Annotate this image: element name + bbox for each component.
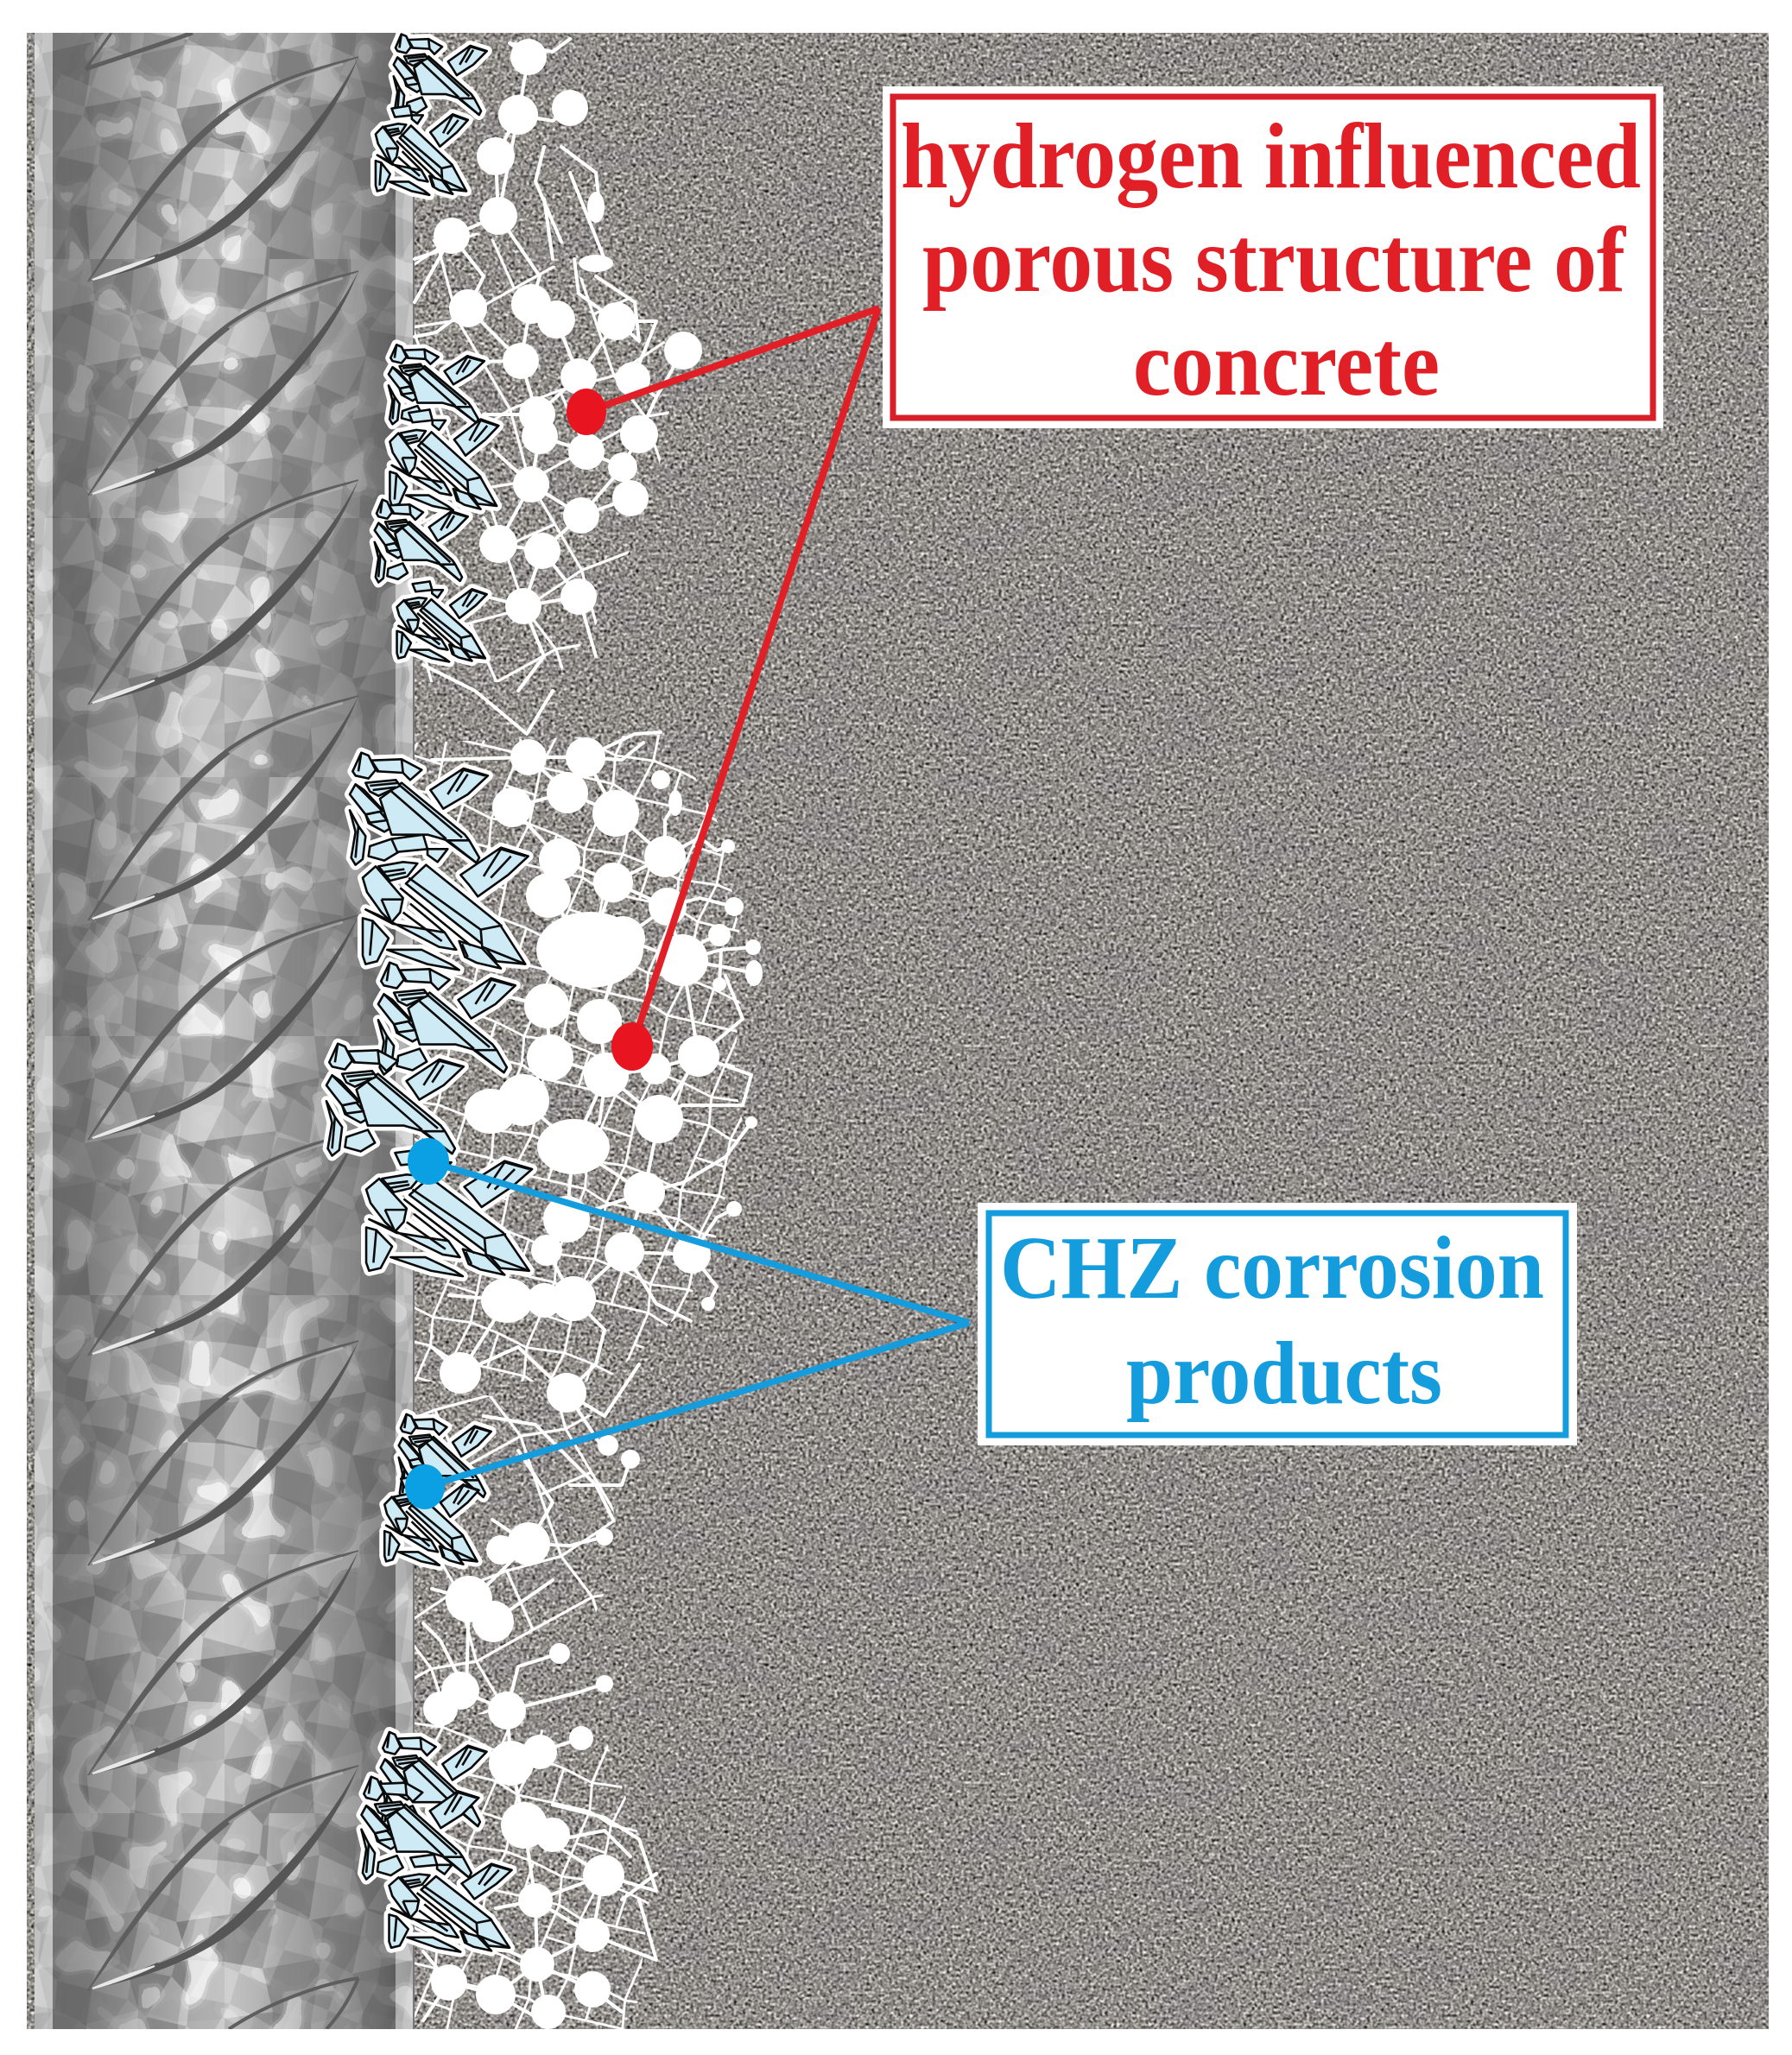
callout: hydrogen influenced porous structure of concrete — [883, 86, 1663, 428]
callout: CHZ corrosion products — [978, 1203, 1577, 1445]
callout: hydrogen influenced porous structure of concrete: concrete — [1133, 313, 1440, 415]
callout: CHZ corrosion products: CHZ corrosion — [1000, 1218, 1544, 1318]
rebar metal grains — [35, 33, 415, 2029]
callout: hydrogen influenced porous structure of concrete: hydrogen influenced — [901, 105, 1641, 208]
rebar ribs — [85, 33, 358, 2029]
corrosion product crystals: halo — [326, 35, 532, 1952]
corrosion product crystals — [326, 35, 532, 1952]
porous structure: crack network — [415, 224, 743, 2029]
steel rebar — [35, 33, 415, 2029]
callout leader lines: blue — [405, 1138, 969, 1509]
porous structure: white pores — [423, 39, 763, 2029]
callout: CHZ corrosion products: products — [1126, 1324, 1442, 1423]
porous structure: white veins — [415, 39, 754, 2024]
callout leader lines: red — [567, 308, 879, 1071]
callout: hydrogen influenced porous structure of concrete: porous structure of — [922, 209, 1627, 312]
